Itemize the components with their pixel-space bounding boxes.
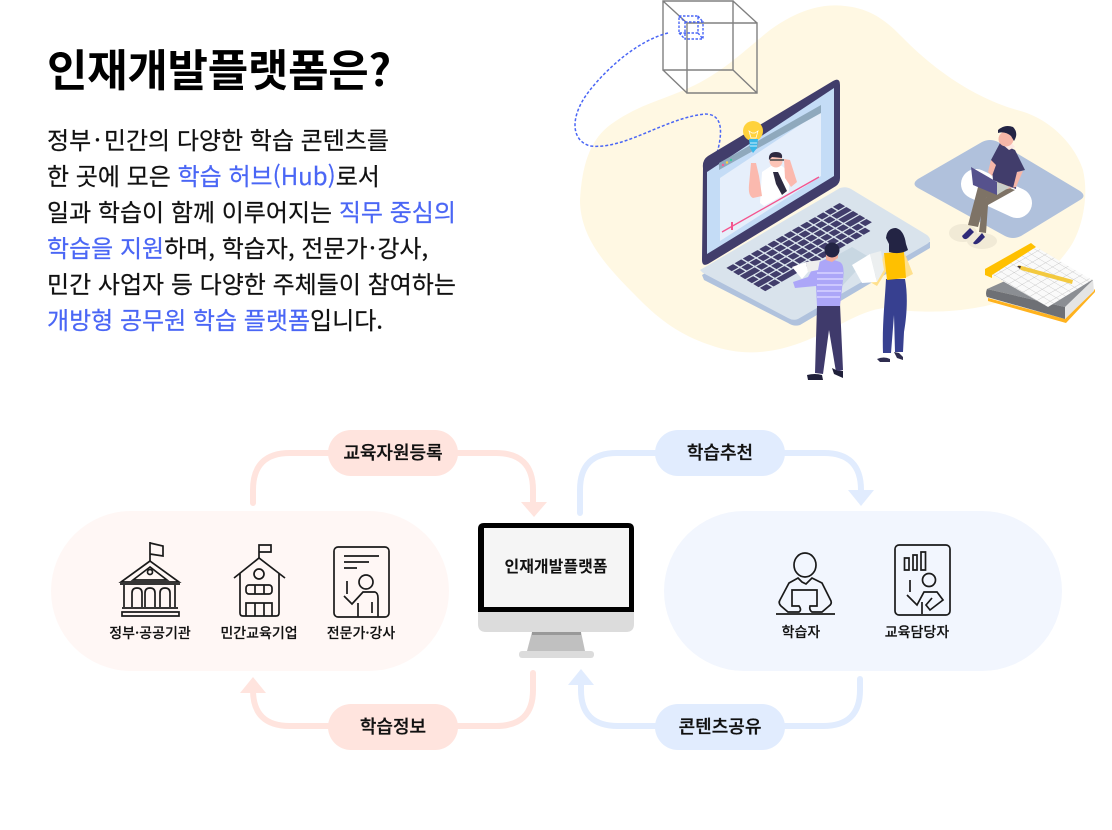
icon: instructor (334, 547, 389, 617)
description text: 일과 학습이 함께 이루어지는 직무 중심의 (47, 193, 456, 228)
background blob (580, 5, 1085, 352)
label: 교육자원등록: 교육자원등록 (343, 439, 443, 465)
arrow: resource registration (253, 453, 547, 517)
description text: 정부·민간의 다양한 학습 콘텐츠를 (47, 121, 389, 156)
description text: 개방형 공무원 학습 플랫폼입니다. (47, 301, 383, 336)
panel: providers (51, 511, 449, 671)
progress bar (722, 177, 819, 232)
label: 학습정보 (328, 704, 458, 750)
label: 학습추천 (655, 430, 785, 476)
icon: wireframe cube (663, 1, 757, 93)
laptop screen frame (702, 80, 840, 265)
description text (47, 121, 456, 336)
laptop base (702, 193, 930, 326)
text: 민간교육기업: 민간교육기업 (220, 623, 298, 643)
screen presenter (749, 152, 797, 206)
illustration: book stack with pencil (985, 243, 1095, 323)
icon: education manager (895, 545, 950, 615)
icon: government building (120, 542, 180, 616)
text: 전문가·강사: 전문가·강사 (327, 623, 395, 643)
arrow: recommendation (580, 453, 874, 513)
icon: learner (776, 553, 835, 614)
trackpad (826, 247, 869, 285)
monitor: 인재개발플랫폼 (504, 553, 608, 577)
arrow: learning information (240, 673, 533, 726)
illustration: laptop (700, 80, 930, 326)
label: 학습추천: 학습추천 (687, 439, 753, 465)
icon: light bulb (743, 121, 763, 153)
description text: 한 곳에 모은 학습 허브(Hub)로서 (47, 157, 380, 192)
label: 교육자원등록 (328, 430, 458, 476)
dashed connector line (575, 33, 738, 202)
description text: 민간 사업자 등 다양한 주체들이 참여하는 (47, 265, 456, 300)
text: 교육담당자: 교육담당자 (885, 622, 949, 642)
label: 학습정보: 학습정보 (360, 713, 426, 739)
keyboard (727, 204, 878, 291)
text: 학습자: 학습자 (782, 622, 820, 642)
monitor (478, 523, 634, 658)
label: 콘텐츠공유 (655, 704, 785, 750)
description text: 학습을 지원하며, 학습자, 전문가·강사, (47, 229, 428, 264)
label: 콘텐츠공유: 콘텐츠공유 (679, 713, 761, 739)
illustration: man sitting on mat (914, 126, 1084, 249)
text: 정부·공공기관: 정부·공공기관 (109, 623, 191, 643)
illustration: woman with yellow top (852, 228, 913, 362)
icon: school (234, 545, 285, 616)
arrow: content sharing (568, 669, 860, 726)
panel: users (664, 511, 1062, 671)
title: 인재개발플랫폼은? (47, 35, 391, 99)
illustration: man with striped shirt (792, 242, 844, 380)
